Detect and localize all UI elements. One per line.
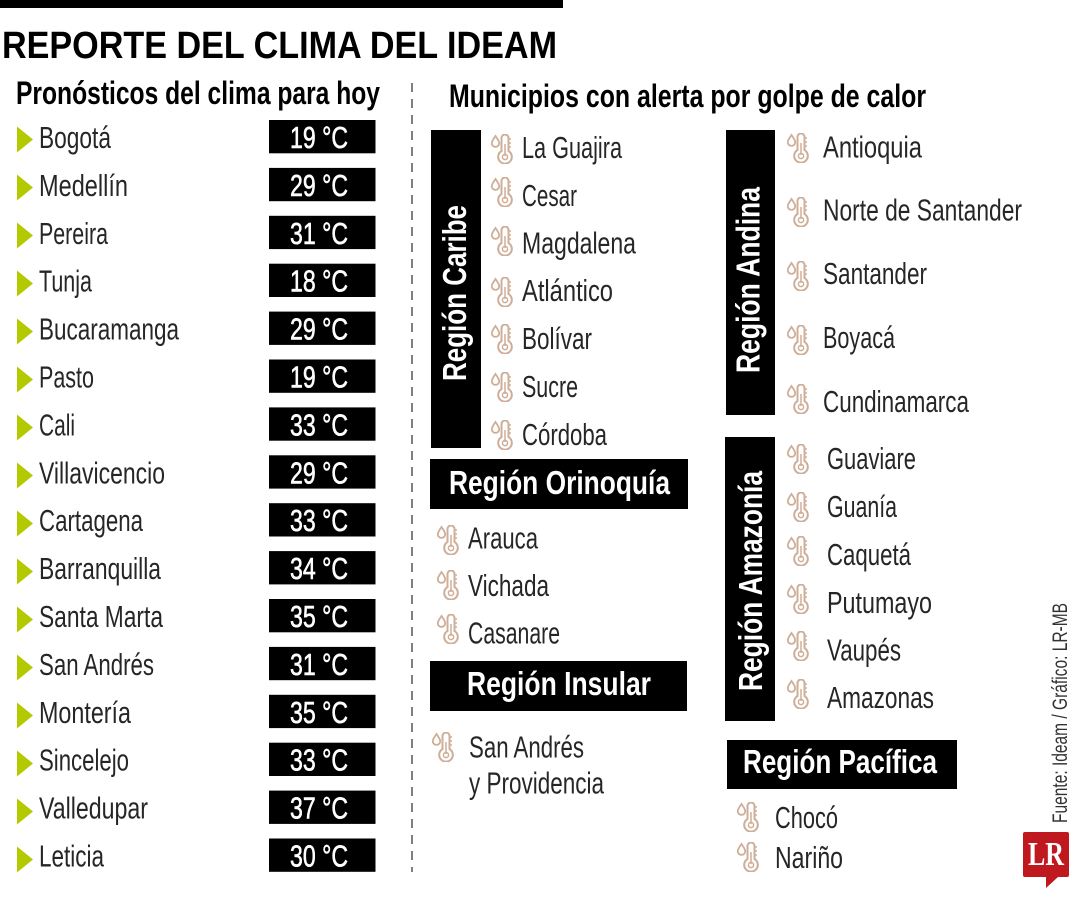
- item: San Andrés y Providencia: y Providencia: [469, 766, 605, 800]
- logo: LR: LR: [1028, 836, 1064, 873]
- row: Villavicencio: Villavicencio: [39, 455, 165, 490]
- item: Nariño: [738, 840, 843, 875]
- row: Cali: 33 °C: [290, 407, 348, 442]
- row: Pereira: 31 °C: [290, 216, 348, 251]
- row: Bucaramanga: 29 °C: [290, 312, 348, 347]
- row: Pasto: [17, 360, 376, 394]
- item: Nariño: Nariño: [775, 840, 843, 875]
- label: Región Andina: Región Andina: [730, 186, 766, 373]
- row: San Andrés: San Andrés: [39, 647, 154, 682]
- row: San Andrés: [17, 647, 376, 682]
- row: Valledupar: [17, 791, 376, 826]
- row: Medellín: Medellín: [39, 168, 128, 203]
- item: Guaviare: Guaviare: [827, 441, 916, 476]
- item: Magdalena: [492, 226, 637, 260]
- row: Montería: [17, 695, 376, 730]
- row: Pasto: Pasto: [39, 360, 94, 394]
- item: San Andrés y Providencia: [433, 730, 605, 800]
- row: Valledupar: Valledupar: [39, 791, 148, 826]
- item: Cesar: [492, 178, 577, 213]
- item: Arauca: [438, 520, 539, 556]
- row: Barranquilla: Barranquilla: [39, 551, 162, 586]
- item: Chocó: Chocó: [775, 800, 838, 835]
- panel: Región Pacífica: [727, 740, 957, 875]
- row: Bogotá: Bogotá: [39, 120, 112, 155]
- label: Región Amazonía: [725, 437, 775, 721]
- item: Bolívar: Bolívar: [522, 321, 592, 356]
- row: Leticia: [17, 838, 376, 874]
- row: Medellín: [17, 168, 376, 203]
- item: Cundinamarca: Cundinamarca: [823, 384, 970, 419]
- row: Barranquilla: [17, 551, 376, 586]
- row: Santa Marta: [17, 599, 376, 634]
- label: Región Amazonía: Región Amazonía: [732, 470, 769, 691]
- label: Región Pacífica: Región Pacífica: [743, 743, 938, 780]
- item: Guaviare: [788, 441, 916, 476]
- row: Medellín: 29 °C: [290, 168, 348, 203]
- item: San Andrés y Providencia: San Andrés: [469, 730, 584, 764]
- panel: Región Orinoquía: [430, 459, 688, 650]
- item: Putumayo: [788, 585, 932, 620]
- row: San Andrés: 31 °C: [290, 647, 348, 682]
- row: Cartagena: 33 °C: [290, 503, 348, 538]
- item: Bolívar: [492, 321, 592, 356]
- item: Cundinamarca: [788, 384, 970, 419]
- row: Sincelejo: [17, 743, 376, 778]
- row: Santa Marta: Santa Marta: [39, 599, 164, 634]
- panel: Región Andina: [726, 130, 1022, 419]
- heading: forecasts: Pronósticos del clima para hoy: [16, 75, 380, 111]
- row: Cali: Cali: [39, 407, 75, 442]
- row: Montería: Montería: [39, 695, 132, 730]
- row: Barranquilla: 34 °C: [290, 551, 348, 586]
- item: La Guajira: [492, 130, 623, 165]
- row: Bogotá: 19 °C: [290, 120, 348, 155]
- item: Amazonas: Amazonas: [827, 680, 934, 715]
- item: Córdoba: [492, 417, 608, 452]
- item: Sucre: Sucre: [522, 369, 578, 404]
- item: Caquetá: Caquetá: [827, 537, 912, 572]
- label: Región Insular: [430, 661, 687, 711]
- top bar: [0, 0, 563, 8]
- item: Vaupés: [788, 632, 901, 668]
- row: Leticia: Leticia: [39, 838, 105, 874]
- item: Santander: Santander: [823, 256, 927, 291]
- item: Antioquia: [788, 130, 923, 164]
- item: Antioquia: Antioquia: [823, 130, 923, 164]
- label: Región Caribe: [431, 130, 481, 448]
- item: Córdoba: Córdoba: [522, 417, 608, 452]
- source note: Fuente: Ideam / Gráfico: LR-MB: [1049, 603, 1072, 823]
- label: Región Insular: Región Insular: [467, 665, 651, 702]
- panel: forecast list: [17, 120, 376, 874]
- row: Pereira: Pereira: [39, 216, 109, 251]
- panel: Región Amazonía: [725, 437, 934, 721]
- item: Santander: [788, 256, 927, 291]
- row: Bucaramanga: [17, 312, 376, 347]
- item: Boyacá: Boyacá: [823, 320, 896, 355]
- title: REPORTE DEL CLIMA DEL IDEAM: [2, 25, 557, 67]
- item: Amazonas: [788, 680, 934, 715]
- item: Vaupés: Vaupés: [827, 632, 901, 668]
- item: Vichada: Vichada: [468, 568, 550, 603]
- item: La Guajira: La Guajira: [522, 130, 623, 165]
- row: Tunja: 18 °C: [290, 264, 348, 299]
- panel: Región Caribe: [431, 130, 637, 452]
- item: Sucre: [492, 369, 578, 404]
- label: Región Caribe: Región Caribe: [436, 205, 473, 381]
- label: Región Orinoquía: Región Orinoquía: [449, 464, 671, 501]
- row: Pereira: [17, 216, 376, 251]
- item: Magdalena: Magdalena: [522, 226, 637, 260]
- row: Leticia: 30 °C: [290, 838, 348, 874]
- row: Santa Marta: 35 °C: [290, 599, 348, 634]
- item: Norte de Santander: [788, 192, 1022, 228]
- item: Putumayo: Putumayo: [827, 585, 932, 620]
- item: Boyacá: [788, 320, 896, 355]
- row: Valledupar: 37 °C: [290, 791, 348, 826]
- row: Tunja: Tunja: [39, 264, 93, 299]
- item: Casanare: [438, 615, 560, 650]
- row: Cartagena: [17, 503, 376, 538]
- label: Región Orinoquía: [430, 459, 688, 509]
- label: Región Andina: [726, 130, 775, 415]
- item: Caquetá: [788, 537, 912, 572]
- row: Cartagena: Cartagena: [39, 503, 144, 538]
- row: Bogotá: [17, 120, 376, 155]
- row: Sincelejo: Sincelejo: [39, 743, 129, 778]
- row: Sincelejo: 33 °C: [290, 743, 348, 778]
- row: Tunja: [17, 264, 376, 299]
- item: Guanía: Guanía: [827, 489, 898, 524]
- item: Guanía: [788, 489, 898, 524]
- label: Región Pacífica: [727, 740, 957, 789]
- item: Arauca: Arauca: [468, 520, 539, 556]
- panel: Región Insular: [430, 661, 687, 800]
- item: Atlántico: [492, 273, 613, 308]
- heading: municipalities: Municipios con alerta por golpe de calor: [449, 78, 926, 114]
- row: Bucaramanga: Bucaramanga: [39, 312, 180, 347]
- item: Cesar: Cesar: [522, 178, 577, 213]
- row: Pasto: 19 °C: [290, 360, 348, 394]
- row: Villavicencio: 29 °C: [290, 455, 348, 490]
- item: Casanare: Casanare: [468, 616, 560, 650]
- row: Cali: [17, 407, 376, 442]
- item: Vichada: [438, 568, 550, 603]
- logo: LR: [1023, 832, 1069, 888]
- row: Villavicencio: [17, 455, 376, 490]
- row: Montería: 35 °C: [290, 695, 348, 730]
- item: Atlántico: Atlántico: [522, 273, 613, 308]
- item: Chocó: [738, 800, 838, 835]
